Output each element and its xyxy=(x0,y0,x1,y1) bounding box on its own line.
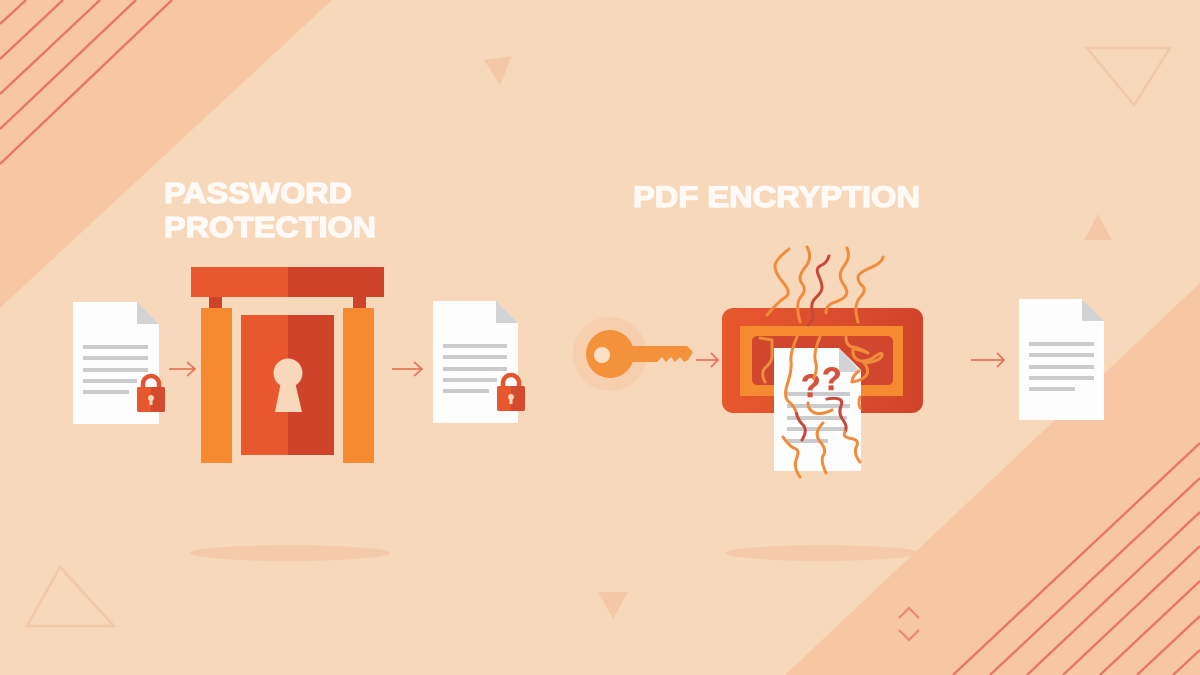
keyhole xyxy=(274,358,302,412)
question marks: ? xyxy=(822,361,842,397)
chevrons bottom right xyxy=(899,608,919,640)
padlock icon xyxy=(497,375,525,411)
encryption machine xyxy=(722,308,923,413)
padlock icon xyxy=(137,376,165,412)
arrow into machine xyxy=(696,353,718,367)
decrypted output document xyxy=(1019,299,1104,420)
top-left diagonal band xyxy=(0,0,332,308)
heading: password protection: PASSWORD xyxy=(164,178,352,210)
question marks: ? xyxy=(801,368,821,404)
bottom-right stripes xyxy=(953,443,1200,675)
arrow to output document xyxy=(971,353,1004,367)
question marks xyxy=(801,361,842,404)
document with lock, output xyxy=(433,301,525,423)
shadow under password gate xyxy=(190,545,390,561)
key icon xyxy=(573,317,693,391)
scrambled document xyxy=(774,348,861,471)
squiggles over document xyxy=(760,337,882,477)
filled triangle right xyxy=(1084,214,1112,240)
bottom-right diagonal band xyxy=(785,283,1200,675)
filled triangle top centre xyxy=(484,56,512,85)
arrow out of gate xyxy=(392,362,422,376)
outline triangle bottom left xyxy=(27,567,114,626)
outline triangle top right xyxy=(1087,48,1170,105)
arrow into gate xyxy=(169,362,195,376)
shadow under encryption machine xyxy=(725,545,919,561)
squiggles above machine xyxy=(767,247,883,325)
heading: password protection: PROTECTION xyxy=(164,212,376,244)
password gate xyxy=(191,267,384,463)
heading: pdf encryption: PDF ENCRYPTION xyxy=(633,181,920,214)
document with lock, input xyxy=(73,302,165,424)
top-left stripes xyxy=(0,0,172,164)
filled triangle bottom centre xyxy=(598,592,628,619)
